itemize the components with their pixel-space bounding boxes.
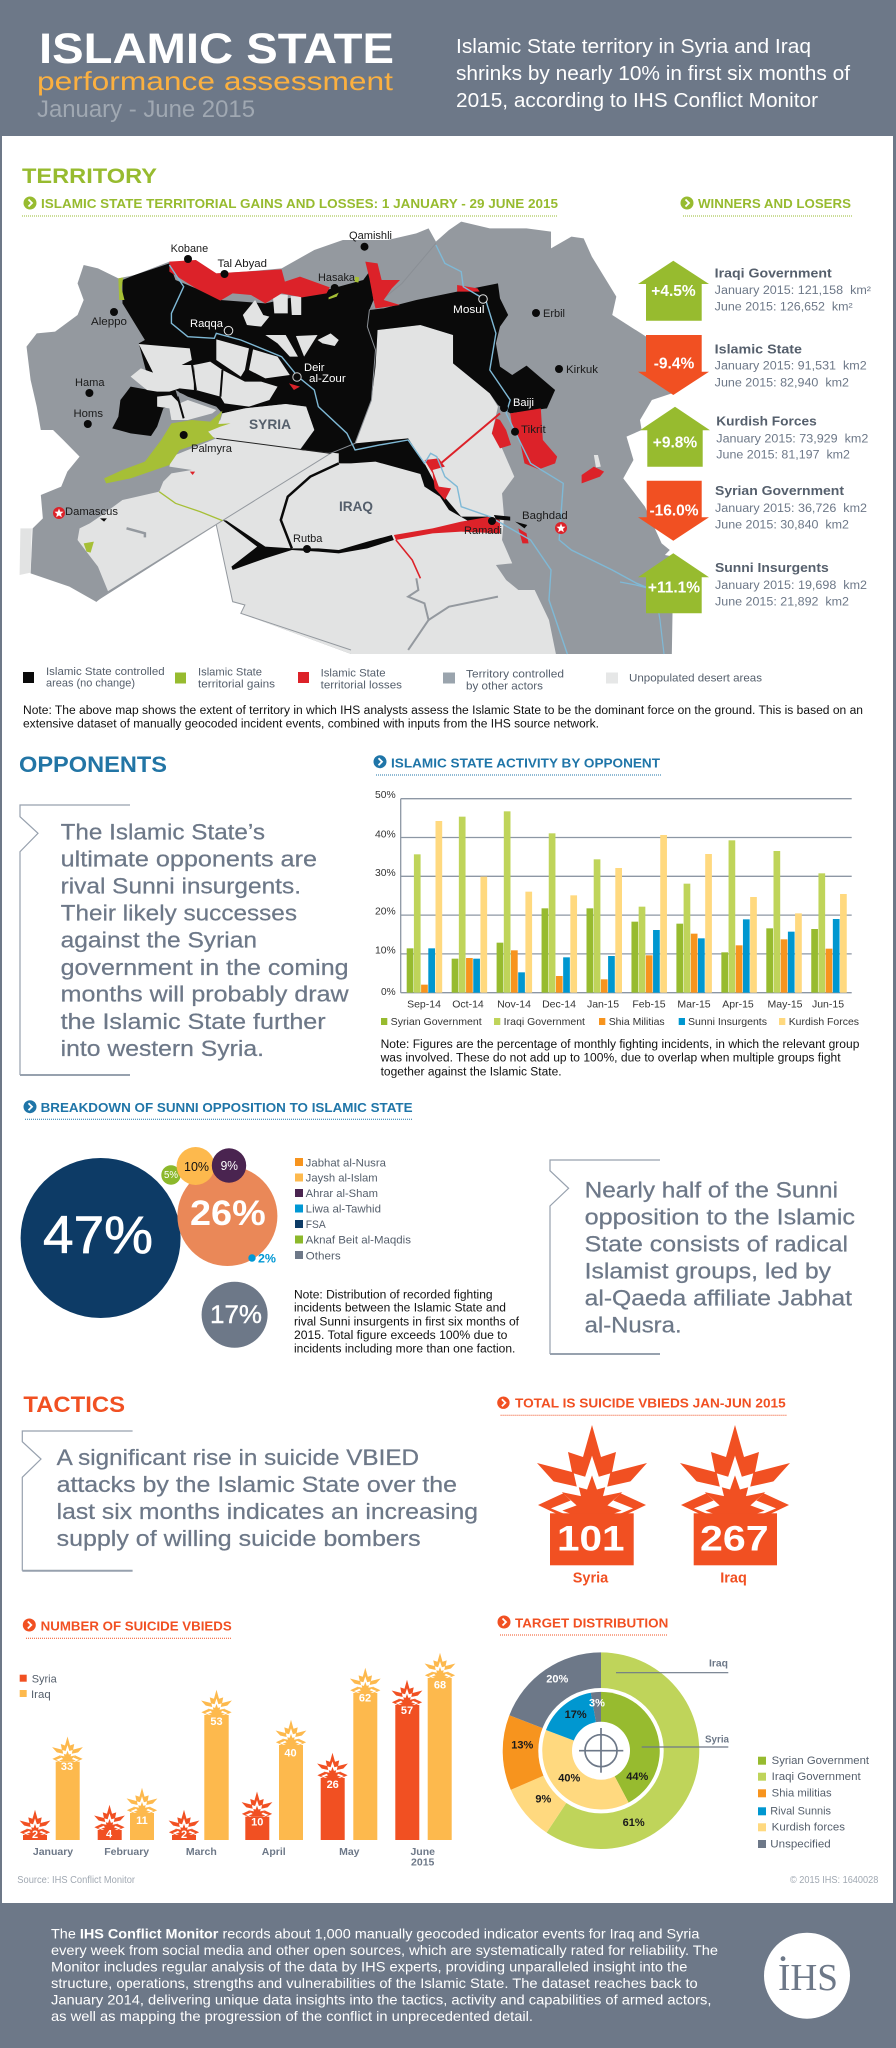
arrow: Syrian Government -16.0%: Syrian Government [715, 484, 845, 498]
copyright: © 2015 IHS: 1640028 [790, 1875, 879, 1886]
map of territorial control [20, 222, 673, 654]
Sunni opposition quote panel: State consists of radical [585, 1231, 848, 1256]
map labels: Kirkuk [566, 364, 599, 376]
bubble: 5%: 5% [164, 1170, 178, 1181]
map legend [23, 666, 763, 693]
bubble chart: Sunni opposition [21, 1147, 277, 1348]
date range: January - June 2015 [37, 96, 255, 123]
header summary [456, 36, 850, 112]
chart legend: Syrian Government [391, 1016, 482, 1028]
month labels: Nov-14 [497, 999, 531, 1011]
arrow: Iraqi Government +4.5%: Iraqi Government [715, 266, 833, 280]
month labels: Sep-14 [407, 999, 441, 1011]
bubble: 10%: 10% [184, 1159, 209, 1174]
Sunni opposition quote panel: al-Qaeda affiliate Jabhat [585, 1286, 853, 1311]
bar chart: activity by opponent: 40% [375, 828, 396, 840]
section heading: opponents: OPPONENTS [19, 752, 167, 777]
donut labels: 13% [511, 1740, 534, 1752]
map labels: Aleppo [91, 316, 127, 328]
subheading: number of suicide VBIEDs: NUMBER OF SUICIDE VBIEDS [41, 1620, 232, 1634]
bubble note: incidents including more than one faction. [294, 1343, 515, 1355]
chart legend: Sunni Insurgents [688, 1016, 767, 1028]
map labels: Damascus [65, 506, 119, 518]
bar: May Syria: 26 [327, 1779, 339, 1791]
bar: February Iraq [127, 1788, 157, 1840]
donut chart: target distribution [503, 1652, 729, 1849]
map labels: Baghdad [522, 510, 568, 522]
bubble note: incidents between the Islamic State and [294, 1303, 506, 1315]
map labels: Baiji [513, 397, 534, 409]
bar: February Iraq: 11 [136, 1815, 148, 1827]
arrow: Iraqi Government +4.5%: January 2015: 121,158 km² [715, 285, 871, 297]
opponents quote panel: ultimate opponents are [61, 847, 317, 872]
subtitle: performance assessment [37, 66, 394, 96]
donut legend: Unspecified [770, 1838, 831, 1850]
donut labels: 61% [623, 1817, 645, 1829]
bars: Jan-15 [586, 859, 622, 993]
arrow: Kurdish Forces +9.8% [640, 407, 868, 467]
bar: February Syria [94, 1805, 125, 1841]
arrow: Kurdish Forces +9.8%: June 2015: 81,197 km2 [716, 450, 850, 462]
tactics quote panel [22, 1431, 478, 1571]
month labels: Jan-15 [587, 999, 619, 1011]
bar: May Iraq: 62 [359, 1693, 371, 1705]
bubble legend: Ahrar al-Sham [306, 1188, 378, 1200]
explosion icon: Syria total 101: Syria [573, 1571, 609, 1587]
bubble legend: Aknaf Beit al-Maqdis [306, 1235, 412, 1247]
header summary: shrinks by nearly 10% in first six months of [456, 63, 850, 85]
map labels: Homs [74, 408, 104, 420]
map labels: Tikrit [521, 424, 546, 436]
bar: April Iraq [276, 1720, 306, 1840]
bubble legend: Jabhat al-Nusra [306, 1157, 387, 1169]
arrow: Sunni Insurgents +11.1%: June 2015: 21,892 km2 [715, 596, 849, 608]
opponents quote panel [20, 805, 349, 1075]
map labels: IRAQ [339, 498, 373, 514]
map legend: areas (no change) [46, 678, 135, 690]
month labels: May-15 [767, 999, 803, 1011]
donut legend: Kurdish forces [772, 1822, 846, 1834]
bubble legend [295, 1157, 412, 1262]
bar: June Iraq: 68 [434, 1679, 446, 1691]
donut labels: 3% [589, 1698, 605, 1710]
map legend: territorial losses [321, 680, 403, 692]
chart legend: Kurdish Forces [789, 1016, 859, 1028]
bar chart: activity by opponent: 50% [375, 789, 396, 801]
month labels [407, 999, 844, 1011]
month labels: Apr-15 [722, 999, 754, 1011]
bubble: 5% [161, 1165, 181, 1185]
donut legend [758, 1755, 869, 1850]
arrow: Sunni Insurgents +11.1%: January 2015: 19,698 km2 [715, 580, 867, 592]
arrow: Sunni Insurgents +11.1% [638, 553, 867, 613]
explosion icon: Iraq total 267: Iraq [720, 1571, 747, 1587]
capital markers [53, 507, 567, 534]
bar chart: activity by opponent: 30% [375, 867, 396, 879]
donut labels: 17% [565, 1709, 587, 1721]
arrow: Syrian Government -16.0%: January 2015: 36,726 km2 [715, 503, 867, 515]
donut labels [511, 1673, 649, 1829]
opponents quote panel: into western Syria. [61, 1036, 264, 1061]
subheading: total suicide VBIEDs: TOTAL IS SUICIDE VBIEDS JAN-JUN 2015 [515, 1397, 786, 1411]
month axis labels: 2015 [411, 1856, 435, 1868]
map legend: Territory controlled [466, 669, 564, 681]
outer ring: Iraq [503, 1652, 699, 1849]
callout: Syria: Syria [705, 1733, 729, 1745]
Sunni opposition quote panel [550, 1160, 855, 1354]
bubble: Liwa 47%: 47% [43, 1206, 153, 1265]
icon: crosshair [579, 1728, 623, 1773]
arrow: Islamic State -9.4%: January 2015: 91,531 km2 [715, 361, 867, 373]
arrow: Islamic State -9.4%: Islamic State [715, 342, 802, 356]
bars: Nov-14 [497, 811, 532, 993]
footer text: as well as mapping the progression of the conflict in unprecedented detail. [51, 2008, 533, 2024]
bar: May Syria [317, 1753, 348, 1840]
map labels: al-Zour [309, 373, 346, 385]
header [37, 25, 850, 123]
donut labels: 20% [546, 1673, 569, 1685]
title: ISLAMIC STATE [39, 25, 394, 73]
month axis labels: March [186, 1846, 217, 1858]
tactics quote panel: last six months indicates an increasing [57, 1499, 478, 1524]
winners and losers list [638, 261, 871, 613]
Sunni opposition quote panel: al-Nusra. [585, 1312, 682, 1337]
explosion icon: Iraq total 267: 267 [700, 1520, 769, 1559]
opponents quote panel: rival Sunni insurgents. [61, 873, 301, 898]
map note [23, 705, 863, 731]
month axis labels: April [262, 1846, 286, 1858]
Sunni opposition quote panel: Islamist groups, led by [585, 1258, 832, 1283]
footer text: Monitor includes regular analysis of the data by IHS experts, providing unparalleled insight into the [51, 1958, 688, 1974]
bubble note: Note: Distribution of recorded fighting [294, 1289, 493, 1301]
map legend: Islamic State controlled [46, 666, 165, 678]
map labels: Rutba [293, 533, 323, 545]
map labels: Tal Abyad [218, 258, 267, 270]
subheading: number of suicide VBIEDs [23, 1618, 232, 1638]
month labels: Dec-14 [542, 999, 576, 1011]
month labels: Jun-15 [812, 999, 844, 1011]
map legend: Islamic State [198, 667, 262, 679]
bubble note: 2015. Total figure exceeds 100% due to [294, 1330, 507, 1342]
chart note [380, 1039, 859, 1078]
month axis labels: February [104, 1846, 149, 1858]
arrow: Iraqi Government +4.5%: +4.5% [651, 283, 696, 300]
map legend: Islamic State [321, 668, 386, 680]
map note: extensive dataset of manually geocoded incident events, combined with inputs from the IHS source network. [23, 719, 599, 731]
arrow: Islamic State -9.4%: -9.4% [654, 355, 694, 372]
opponents quote panel: government in the coming [61, 955, 349, 980]
bar chart: activity by opponent: 20% [375, 906, 396, 918]
month axis labels [33, 1846, 435, 1868]
donut labels: 40% [558, 1773, 581, 1785]
map labels: Raqqa [190, 318, 224, 330]
map labels: Kobane [171, 243, 208, 255]
footer text: The IHS Conflict Monitor records about 1,000 manually geocoded indicator events for Iraq and Syria [51, 1925, 700, 1941]
donut labels: 9% [535, 1793, 551, 1805]
subheading: winners and losers: WINNERS AND LOSERS [698, 197, 851, 211]
map labels: Ramadi [464, 525, 502, 537]
footer text [51, 1925, 718, 2024]
subheading: Sunni opposition breakdown [24, 1100, 413, 1119]
inner ring: Syria [542, 1692, 660, 1809]
map labels: SYRIA [249, 416, 291, 432]
bubble: Liwa 47% [21, 1158, 181, 1318]
bar chart: monthly suicide VBIEDs [20, 1653, 455, 1868]
bar: June Syria: 57 [401, 1705, 413, 1717]
bars: Jun-15 [811, 873, 847, 993]
arrow: Islamic State -9.4% [638, 335, 867, 395]
month axis labels: June [410, 1846, 435, 1858]
bars: Sep-14 [407, 821, 442, 993]
month labels: Mar-15 [677, 999, 711, 1011]
arrow: Kurdish Forces +9.8%: +9.8% [653, 434, 697, 451]
subheading: territorial gains and losses: ISLAMIC STATE TERRITORIAL GAINS AND LOSSES: 1 JANUARY - 29 JUNE 2015 [41, 197, 558, 211]
arrow: Islamic State -9.4%: June 2015: 82,940 km2 [715, 377, 849, 389]
header summary: 2015, according to IHS Conflict Monitor [456, 90, 818, 112]
month axis labels: May [339, 1846, 360, 1858]
subheading: total suicide VBIEDs [497, 1396, 787, 1415]
bar: May Iraq [350, 1668, 381, 1840]
map labels: Hasaka [318, 272, 356, 284]
arrow: Iraqi Government +4.5% [638, 261, 871, 321]
bubble: 10% [177, 1147, 215, 1185]
bubble note [294, 1289, 520, 1355]
arrow: Sunni Insurgents +11.1%: +11.1% [648, 579, 700, 596]
explosion icon: Iraq total 267 [680, 1425, 790, 1587]
opponents quote panel: months will probably draw [61, 982, 349, 1007]
bars: Apr-15 [721, 840, 757, 993]
bar: February Syria: 4 [106, 1829, 113, 1841]
opponents quote panel: the Islamic State further [61, 1009, 326, 1034]
Sunni opposition quote panel: Nearly half of the Sunni [585, 1177, 838, 1202]
callout: Iraq: Iraq [709, 1658, 728, 1670]
bubble: 2%: 2% [258, 1252, 276, 1266]
subheading: activity by opponent [374, 755, 661, 775]
arrow: Iraqi Government +4.5%: June 2015: 126,652 km² [715, 301, 853, 313]
bubble legend: Liwa al-Tawhid [306, 1204, 381, 1216]
bar: January Syria: 2 [32, 1829, 38, 1841]
bar chart: activity by opponent: 10% [375, 944, 396, 956]
bar: June Syria [392, 1680, 422, 1840]
month axis labels: January [33, 1846, 73, 1858]
IHS logo [764, 1933, 850, 2019]
map labels: Deir [304, 362, 325, 374]
map labels [65, 230, 599, 545]
tactics quote panel: A significant rise in suicide VBIED [57, 1445, 419, 1470]
chart legend: Shia Militias [609, 1016, 665, 1028]
bar: June Iraq [425, 1653, 455, 1840]
map labels: Erbil [543, 308, 565, 320]
bubble note: rival Sunni insurgents in first six months of [294, 1316, 520, 1328]
arrow: Syrian Government -16.0% [638, 481, 867, 541]
bar: January Iraq [52, 1736, 83, 1840]
header summary: Islamic State territory in Syria and Iraq [456, 36, 811, 58]
explosion icon: Syria total 101 [537, 1425, 647, 1587]
bar: March Syria: 2 [181, 1829, 187, 1841]
bar legend [20, 1673, 58, 1701]
subheading: territorial gains and losses [22, 196, 558, 216]
footer text: structure, operations, strengths and vulnerabilities of the Islamic State. The dataset reaches back to [51, 1975, 698, 1991]
section heading: tactics: TACTICS [23, 1392, 125, 1417]
bubble: 9% [212, 1148, 246, 1183]
footer text: January 2014, delivering unique data insights into the tactics, activity and capabilities of armed actors, [51, 1992, 711, 2008]
map legend: Unpopulated desert areas [629, 672, 763, 684]
arrow: Kurdish Forces +9.8%: January 2015: 73,929 km2 [716, 433, 868, 445]
bar: January Syria [20, 1810, 50, 1841]
bubble legend: Jaysh al-Islam [306, 1173, 378, 1185]
opponents quote panel: The Islamic State’s [61, 819, 265, 844]
bar: March Iraq: 53 [210, 1716, 223, 1728]
month labels: Feb-15 [632, 999, 666, 1011]
callout: Syria [642, 1733, 729, 1747]
city markers [84, 243, 563, 553]
bars: May-15 [766, 851, 802, 993]
Sunni opposition quote panel: opposition to the Islamic [585, 1204, 855, 1229]
arrow: Sunni Insurgents +11.1%: Sunni Insurgents [715, 561, 829, 575]
IHS logo: IHS [778, 1957, 838, 1999]
map legend: by other actors [466, 681, 544, 693]
opponents quote panel: Their likely successes [61, 901, 297, 926]
section heading: territory: TERRITORY [22, 164, 157, 188]
chart note: was involved. These do not add up to 100%, due to overlap when multiple groups fight [380, 1053, 841, 1065]
subheading: activity by opponent: ISLAMIC STATE ACTIVITY BY OPPONENT [391, 756, 660, 770]
bars: Oct-14 [452, 817, 487, 993]
bubble: Jabhat al-Nusra 26% [177, 1166, 277, 1266]
footer text: every week from social media and other open sources, which are systematically rated for reliability. The [51, 1942, 718, 1958]
bar chart: activity by opponent [375, 789, 859, 1028]
bar: April Syria [242, 1792, 272, 1840]
explosion icon: Syria total 101: 101 [557, 1520, 625, 1559]
bar: March Syria [169, 1810, 199, 1841]
chart legend [381, 1016, 859, 1028]
bar: April Syria: 10 [251, 1816, 263, 1828]
subheading: target distribution [498, 1616, 668, 1635]
chart note: Note: Figures are the percentage of monthly fighting incidents, in which the relevant group [381, 1039, 859, 1051]
donut labels: 44% [626, 1771, 649, 1783]
map labels: Mosul [453, 304, 484, 316]
chart legend: Iraqi Government [504, 1016, 585, 1028]
bubble: Jabhat al-Nusra 26%: 26% [190, 1194, 266, 1233]
chart note: together against the Islamic State. [381, 1066, 562, 1078]
donut legend: Syrian Government [772, 1755, 869, 1767]
bubble legend: FSA [306, 1219, 326, 1231]
bar: January Iraq: 33 [61, 1761, 73, 1773]
bubble legend: Others [306, 1250, 341, 1262]
bar legend: Syria [32, 1673, 58, 1685]
map note: Note: The above map shows the extent of territory in which IHS analysts assess the Islamic State to be the dominant force on the ground. This is based on an [23, 705, 863, 717]
bar: April Iraq: 40 [284, 1748, 297, 1760]
map legend: territorial gains [198, 679, 276, 691]
bubble: others 17%: 17% [210, 1301, 262, 1329]
bars: Dec-14 [542, 833, 577, 993]
bar chart: activity by opponent: 0% [381, 986, 396, 998]
map labels: Palmyra [191, 443, 233, 455]
map labels: Hama [75, 377, 105, 389]
bar: March Iraq [201, 1690, 232, 1840]
source line: Source: IHS Conflict Monitor [17, 1875, 136, 1886]
subheading: winners and losers [680, 196, 853, 216]
bubble: 9%: 9% [221, 1158, 238, 1173]
arrow: Syrian Government -16.0%: June 2015: 30,840 km2 [715, 520, 849, 532]
bars: Feb-15 [631, 835, 667, 993]
donut legend: Shia militias [772, 1788, 832, 1800]
bubble: others 17% [202, 1282, 268, 1348]
map labels: Qamishli [349, 230, 392, 242]
donut legend: Rival Sunnis [770, 1805, 831, 1817]
subheading: target distribution: TARGET DISTRIBUTION [515, 1617, 668, 1631]
bars: Mar-15 [676, 854, 712, 993]
subheading: Sunni opposition breakdown: BREAKDOWN OF SUNNI OPPOSITION TO ISLAMIC STATE [41, 1101, 413, 1115]
arrow: Kurdish Forces +9.8%: Kurdish Forces [716, 414, 817, 428]
arrow: Syrian Government -16.0%: -16.0% [649, 503, 699, 520]
month labels: Oct-14 [452, 999, 484, 1011]
tactics quote panel: attacks by the Islamic State over the [57, 1472, 457, 1497]
callout: Iraq [616, 1658, 728, 1673]
tactics quote panel: supply of willing suicide bombers [57, 1526, 421, 1551]
donut legend: Iraqi Government [772, 1771, 861, 1783]
bar legend: Iraq [31, 1689, 51, 1701]
opponents quote panel: against the Syrian [61, 928, 257, 953]
bubble: 2% [248, 1252, 276, 1266]
